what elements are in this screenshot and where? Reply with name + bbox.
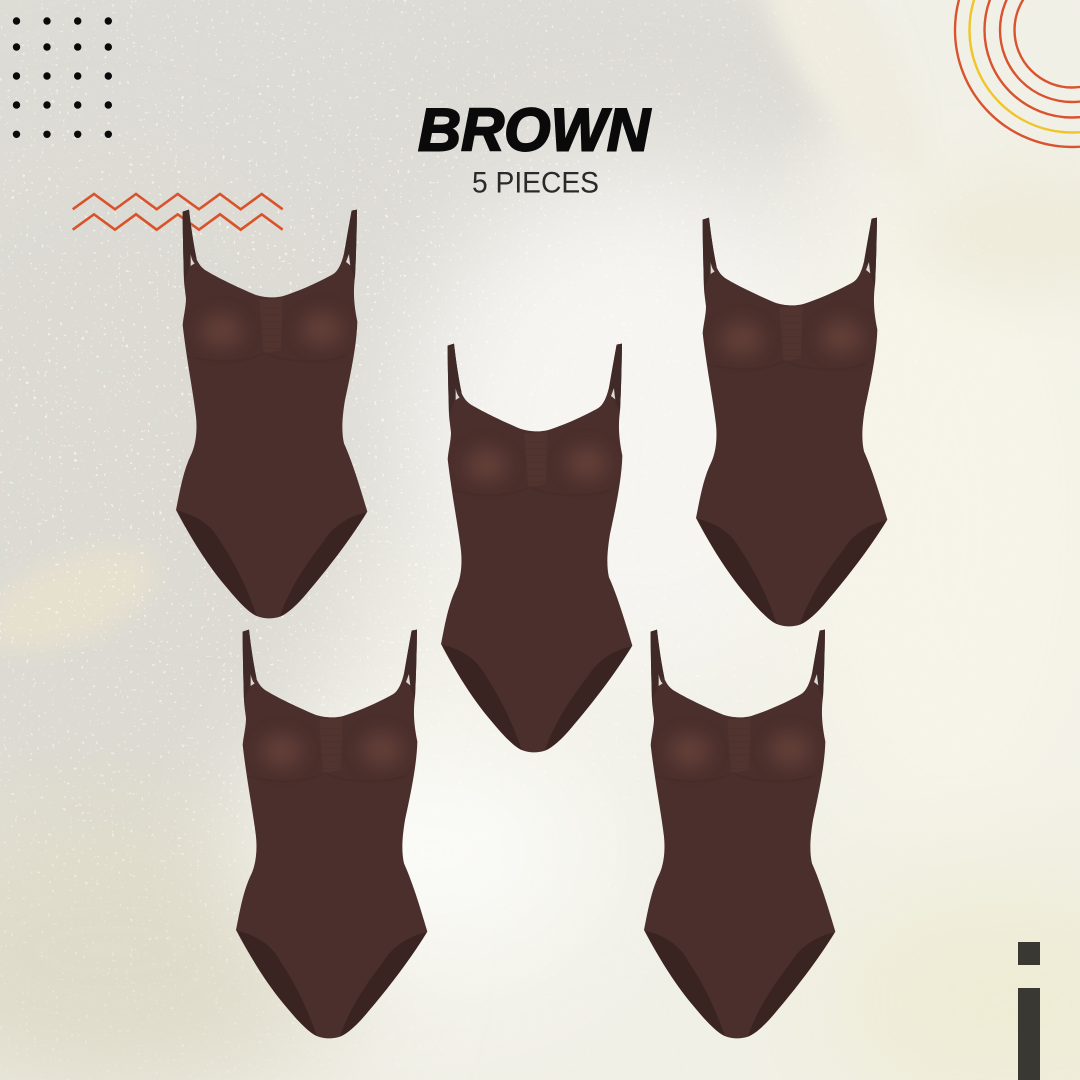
title: BROWN: BROWN — [418, 96, 652, 164]
bodysuit 4: bottom left — [236, 630, 427, 1038]
icon: dot grid — [13, 17, 112, 138]
bodysuit 1: top left — [176, 210, 367, 618]
bodysuit 3: top right — [696, 218, 887, 626]
icon: concentric arcs top right — [955, 0, 1080, 147]
icon: orange zigzag lines — [73, 194, 283, 230]
bodysuit 5: bottom right — [644, 630, 835, 1038]
bodysuit 2: centre — [441, 344, 632, 752]
subtitle: 5 PIECES: 5 PIECES — [472, 166, 599, 200]
icon: letter i mark bottom right — [1018, 942, 1040, 1080]
